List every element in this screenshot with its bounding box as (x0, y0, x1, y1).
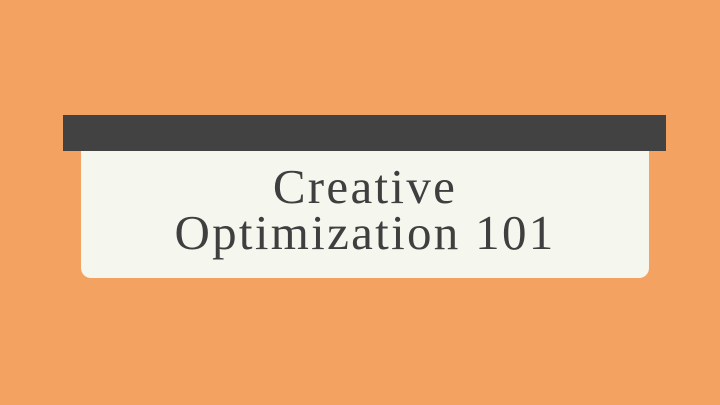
panel: title card (81, 151, 649, 278)
title: Creative (273, 159, 457, 214)
header bar (63, 115, 666, 151)
title: Optimization 101 (174, 205, 556, 260)
title (174, 159, 556, 260)
